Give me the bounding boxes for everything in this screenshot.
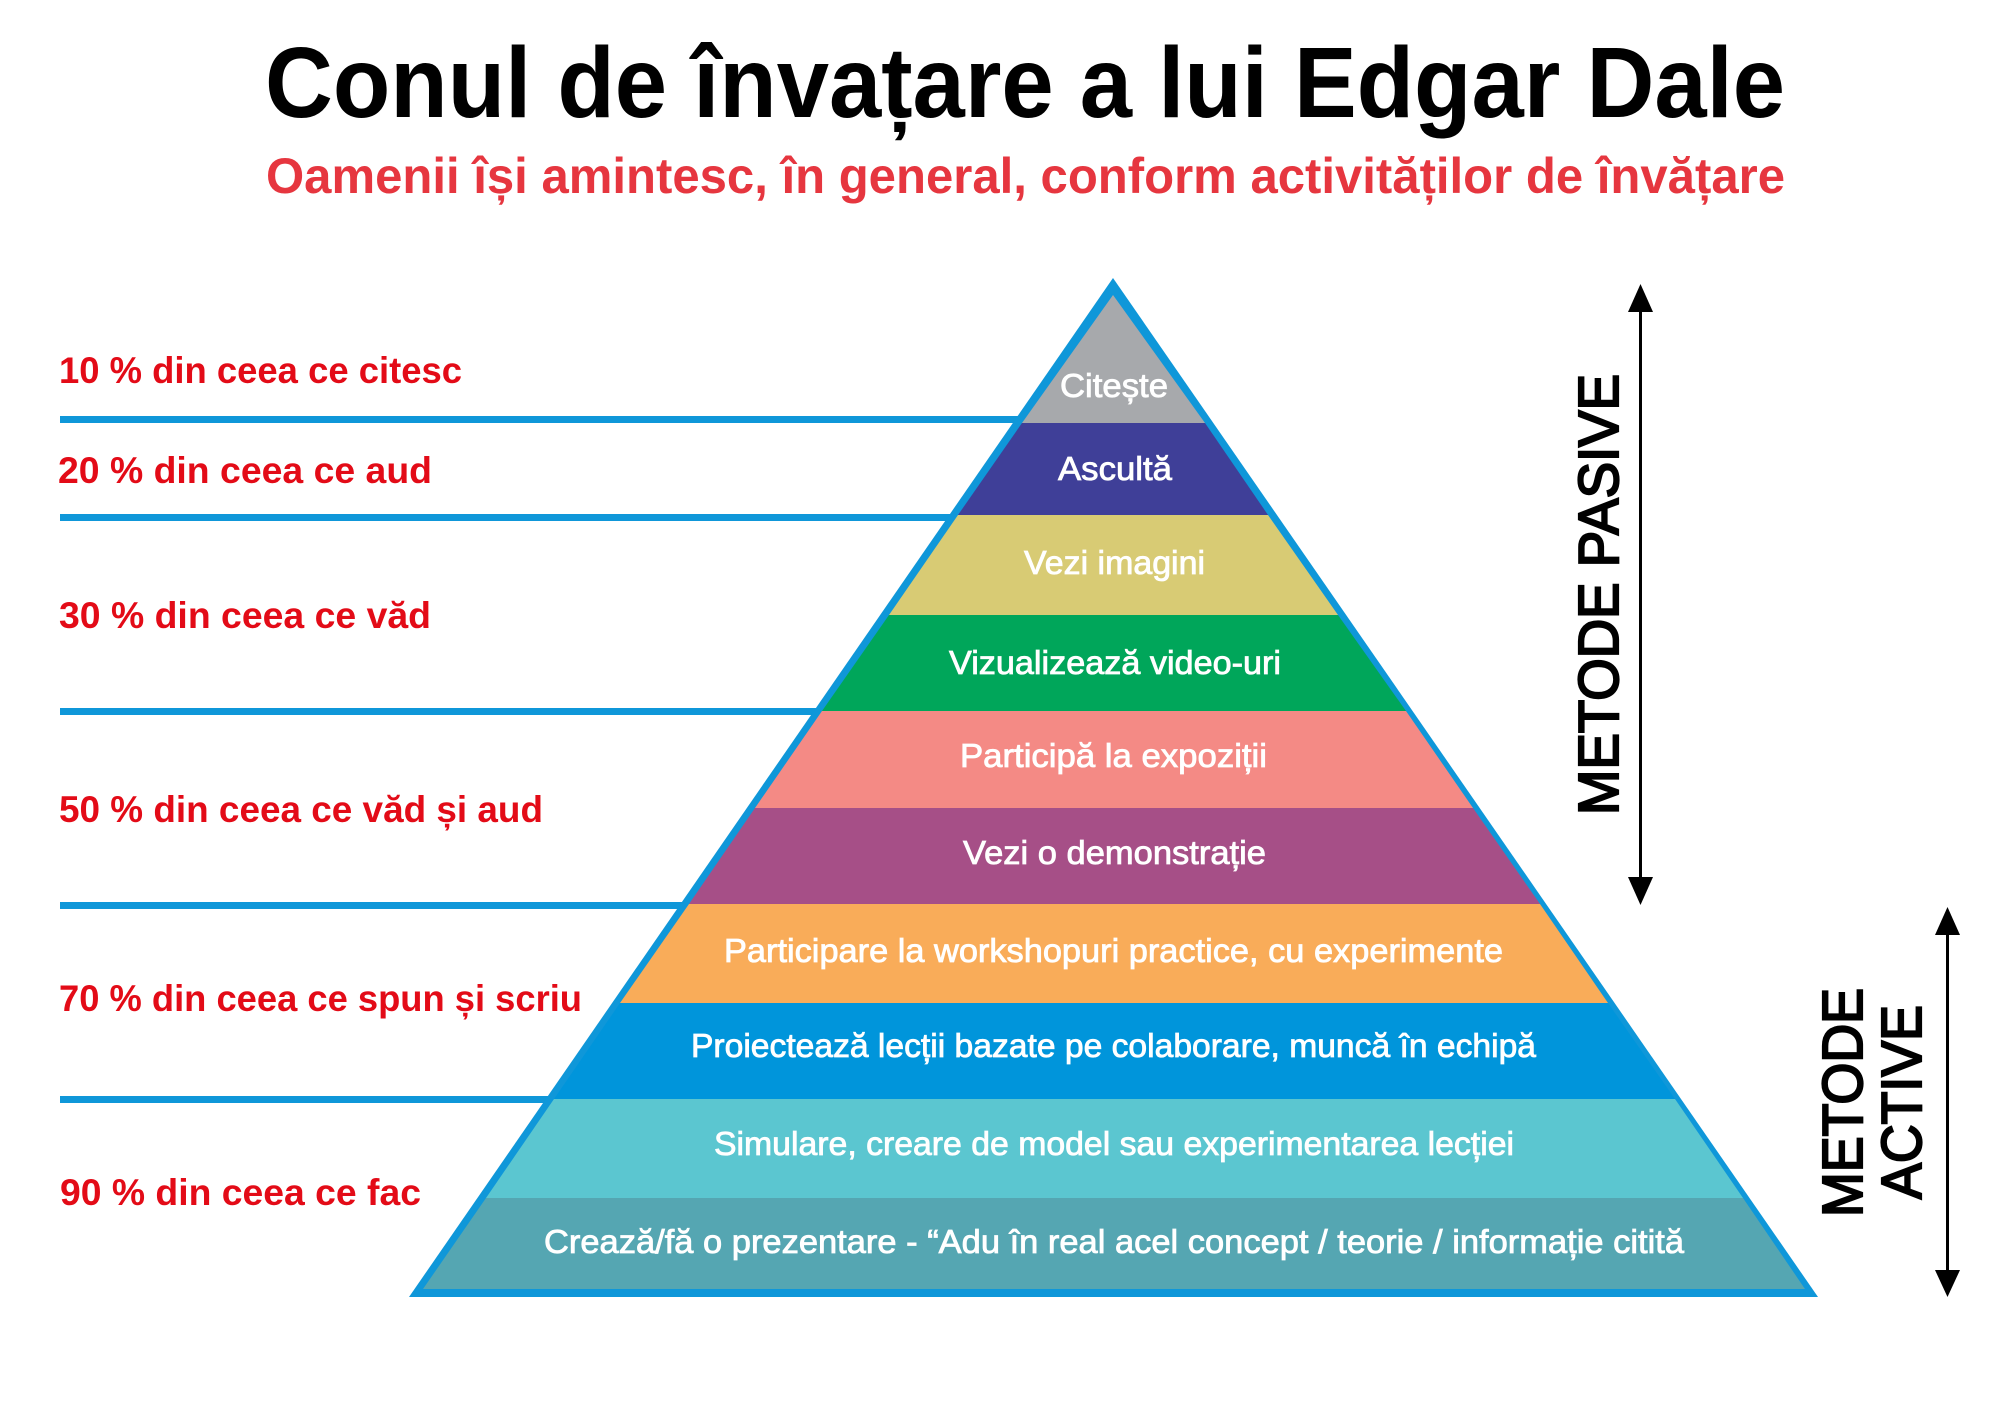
label: 10 percent: 10 % din ceea ce citesc — [59, 350, 462, 391]
label: metode active: METODE — [1811, 988, 1875, 1217]
label: 30 percent — [59, 595, 830, 715]
label: 20 percent: 20 % din ceea ce aud — [58, 450, 432, 491]
band: Participă la expoziții: Participă la expoziții — [960, 737, 1267, 774]
label: metode active: ACTIVE — [1870, 1005, 1934, 1199]
band: Participă la expoziții — [755, 711, 1473, 808]
band: Ascultă: Ascultă — [1058, 450, 1173, 487]
band: Vezi o demonstrație — [689, 808, 1540, 904]
subtitle: Oamenii își amintesc, în general, conform activităților de învățare — [266, 148, 1785, 204]
pyramid outer border — [409, 278, 1818, 1297]
band: Vizualizează video-uri — [822, 615, 1406, 711]
pyramid — [409, 278, 1818, 1297]
label: 90 percent: 90 % din ceea ce fac — [60, 1172, 421, 1213]
label: 50 percent: 50 % din ceea ce văd și aud — [59, 789, 543, 830]
band: Vezi imagini: Vezi imagini — [1024, 544, 1205, 581]
title: Conul de învațare a lui Edgar Dale — [265, 27, 1785, 141]
label: 50 percent — [59, 789, 696, 909]
band: Vezi imagini — [889, 515, 1338, 615]
label: 70 percent: 70 % din ceea ce spun și scriu — [59, 978, 582, 1019]
band: Vezi o demonstrație: Vezi o demonstrație — [963, 834, 1266, 871]
arrow: metode pasive — [1628, 284, 1653, 905]
band: simulare: Simulare, creare de model sau experimentarea lecției — [714, 1125, 1514, 1162]
label: metode active — [1811, 988, 1934, 1217]
label: 30 percent: 30 % din ceea ce văd — [59, 595, 431, 636]
band: prezentare — [423, 1198, 1805, 1289]
band: lecții colaborare — [554, 1003, 1675, 1099]
band: workshopuri: Participare la workshopuri practice, cu experimente — [724, 932, 1503, 969]
label: 70 percent — [59, 978, 582, 1103]
band: Ascultă — [958, 423, 1268, 515]
band: workshopuri — [620, 904, 1608, 1003]
label: metode pasive: METODE PASIVE — [1567, 374, 1631, 815]
band: Vizualizează video-uri: Vizualizează video-uri — [949, 644, 1281, 681]
label: 10 percent — [59, 350, 1030, 423]
band: simulare — [486, 1099, 1743, 1198]
band: Citește: Citește — [1060, 367, 1168, 404]
band: Citește — [1022, 295, 1205, 423]
label: 20 percent — [58, 450, 960, 521]
arrow: metode active — [1935, 907, 1960, 1297]
band: lecții colaborare: Proiectează lecții bazate pe colaborare, muncă în echipă — [691, 1027, 1537, 1064]
left percentage labels — [58, 350, 1030, 1213]
band: prezentare: Crează/fă o prezentare - “Adu în real acel concept / teorie / informație citită — [544, 1223, 1685, 1260]
